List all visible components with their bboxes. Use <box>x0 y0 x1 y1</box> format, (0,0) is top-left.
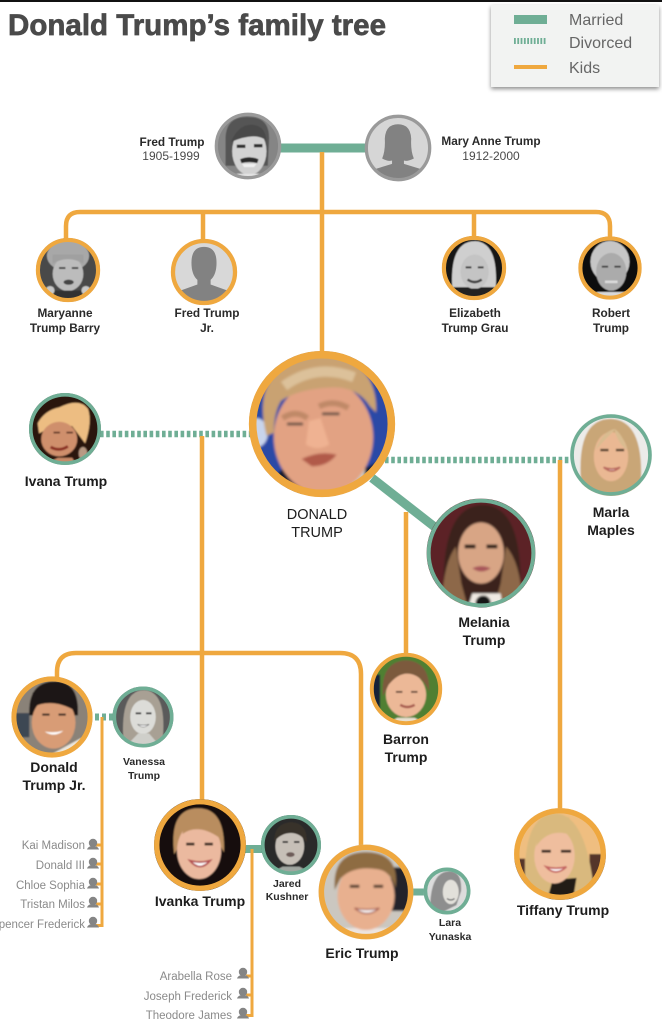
portrait: Lara Yunaska <box>424 868 470 914</box>
grandchildren: Ivanka kids: Joseph Frederick <box>144 991 232 1003</box>
label: Elizabeth Trump Grau <box>442 306 508 335</box>
line: Eric and Lara married <box>412 888 428 896</box>
grandchildren: Ivanka kids: Arabella Rose <box>160 971 232 983</box>
portrait: Jared Kushner <box>261 815 321 875</box>
label: Donald Trump Jr.: Donald <box>30 759 78 775</box>
grandchildren: Donald Jr. kids: Chloe Sophia <box>16 880 86 892</box>
portrait: Vanessa Trump <box>112 686 174 748</box>
label: Mary Anne Trump: Mary Anne Trump <box>441 134 541 148</box>
line: Ivana kids <box>200 436 204 802</box>
line: Ivanka and Jared married <box>244 845 264 853</box>
portrait: Robert Trump <box>578 236 642 300</box>
label: Robert Trump <box>592 306 630 335</box>
label: Robert Trump: Robert <box>592 306 630 320</box>
label: Elizabeth Trump Grau: Elizabeth <box>449 306 501 320</box>
label: Donald Trump: TRUMP <box>291 525 343 541</box>
label: Fred Trump <box>140 135 204 163</box>
grandchildren: Ivanka kids <box>144 968 249 1022</box>
label: Jared Kushner <box>266 878 308 903</box>
label: Melania Trump: Melania <box>458 614 510 630</box>
title: Donald Trump’s family tree <box>8 9 386 42</box>
label: Maryanne Trump Barry <box>30 306 101 335</box>
legend: divorced <box>514 35 632 52</box>
label: Fred Trump: 1905-1999 <box>142 149 200 163</box>
label: Jared Kushner: Jared <box>273 878 301 890</box>
label: Ivanka Trump: Ivanka Trump <box>155 893 245 909</box>
label: Fred Trump Jr.: Jr. <box>200 321 214 335</box>
label: Tiffany Trump: Tiffany Trump <box>517 902 609 918</box>
grandchildren: Donald Jr. kids: Tristan Milos <box>20 899 85 911</box>
label: Barron Trump: Barron <box>383 731 429 747</box>
label: Lara Yunaska <box>429 917 471 943</box>
label: Vanessa Trump: Vanessa <box>123 756 165 768</box>
legend: married <box>514 12 623 29</box>
label: Donald Trump: DONALD <box>287 507 347 523</box>
portrait: Ivana Trump <box>29 393 101 465</box>
label: Maryanne Trump Barry: Maryanne <box>37 306 93 320</box>
portrait: Marla Maples <box>570 414 652 497</box>
line: Vanessa divorced <box>95 714 116 720</box>
portrait: Donald Trump Jr. <box>12 676 92 758</box>
connector lines <box>57 148 610 1016</box>
line: Fred and Mary Anne married <box>278 144 370 152</box>
legend: married: Married <box>569 12 623 29</box>
label: Donald Trump Jr. <box>22 759 86 793</box>
line: Donald Jr and Eric branch <box>57 653 361 850</box>
portrait: Ivanka Trump <box>154 799 246 891</box>
label: Lara Yunaska: Yunaska <box>429 931 471 943</box>
grandchildren: Donald Jr. kids: Donald III <box>36 860 85 872</box>
top edge bar <box>0 0 662 2</box>
label: Vanessa Trump <box>123 756 165 782</box>
label: Melania Trump <box>458 614 510 648</box>
label: Marla Maples: Maples <box>587 522 635 538</box>
legend: kids <box>514 60 600 77</box>
label: Marla Maples <box>587 504 635 538</box>
portrait: Eric Trump <box>318 844 414 940</box>
label: Lara Yunaska: Lara <box>439 917 461 929</box>
legend: kids: Kids <box>569 60 600 77</box>
portrait: Donald Trump <box>245 351 395 497</box>
label: Fred Trump Jr. <box>175 306 239 335</box>
label: Eric Trump: Eric Trump <box>325 945 399 961</box>
portrait: Fred Trump <box>215 113 281 179</box>
grandchildren: Donald Jr. kids: Kai Madison <box>22 840 85 852</box>
label: Vanessa Trump: Trump <box>128 770 160 782</box>
line: siblings branch <box>66 212 610 242</box>
label: Fred Trump: Fred Trump <box>140 135 204 149</box>
label: Elizabeth Trump Grau: Trump Grau <box>442 321 508 335</box>
label: Mary Anne Trump: 1912-2000 <box>462 149 520 163</box>
line: Ivana divorced <box>100 431 252 437</box>
legend <box>491 5 659 87</box>
portrait: Tiffany Trump <box>514 808 606 900</box>
label: Fred Trump Jr.: Fred Trump <box>175 306 239 320</box>
label: Barron Trump: Trump <box>385 749 427 765</box>
portrait: Elizabeth Trump Grau <box>442 236 506 300</box>
portrait: Maryanne Trump Barry <box>36 238 100 302</box>
portrait: Fred Trump Jr. silhouette <box>171 239 237 305</box>
portrait: Barron Trump <box>370 653 442 725</box>
label: Robert Trump: Trump <box>593 321 629 335</box>
line: Melania married <box>372 478 436 528</box>
legend: divorced: Divorced <box>569 35 632 52</box>
grandchildren: Donald Jr. kids <box>0 839 99 931</box>
label: Barron Trump <box>383 731 429 765</box>
line: Barron <box>404 512 408 656</box>
line: Tiffany <box>558 460 562 810</box>
line: Don Jr kids <box>95 717 102 926</box>
portrait: Mary Anne Trump silhouette <box>365 115 431 181</box>
line: Marla divorced <box>385 457 574 463</box>
label: Maryanne Trump Barry: Trump Barry <box>30 321 101 335</box>
line: Ivanka kids <box>245 849 252 1016</box>
grandchildren: Ivanka kids: Theodore James <box>146 1010 232 1022</box>
label: Mary Anne Trump <box>441 134 541 163</box>
portrait: Melania Trump <box>426 498 536 611</box>
label: Jared Kushner: Kushner <box>266 891 308 903</box>
label: Donald Trump Jr.: Trump Jr. <box>22 777 86 793</box>
label: Donald Trump <box>287 507 347 541</box>
label: Melania Trump: Trump <box>463 632 505 648</box>
line: Donald descent <box>320 152 324 355</box>
label: Ivana Trump: Ivana Trump <box>25 473 107 489</box>
label: Marla Maples: Marla <box>593 504 629 520</box>
